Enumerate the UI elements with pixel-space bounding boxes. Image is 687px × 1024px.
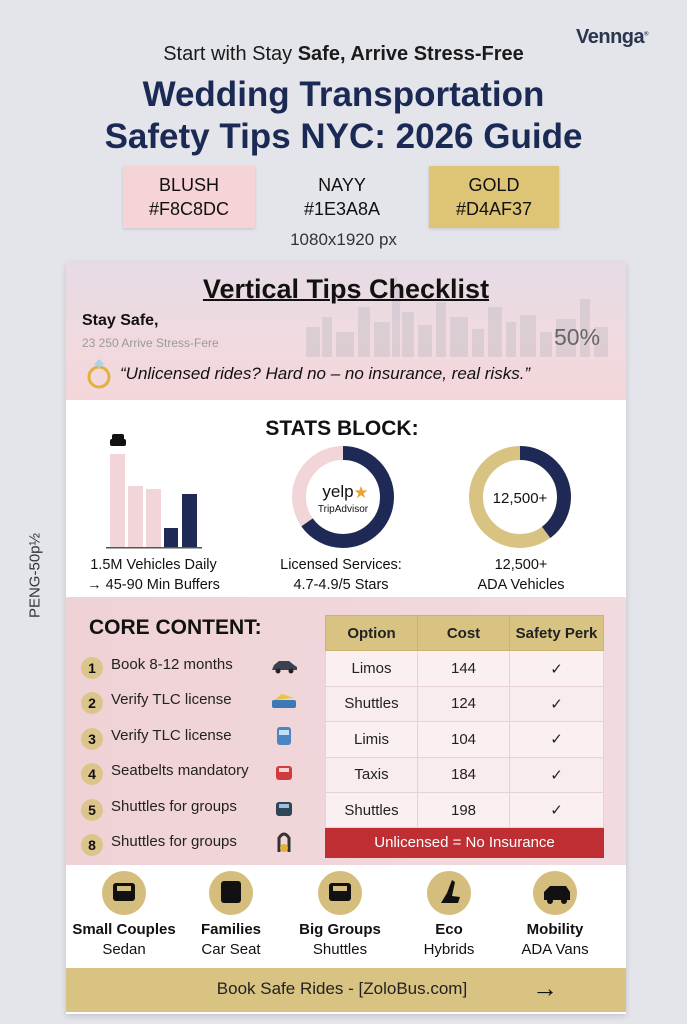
table: ✓ <box>550 767 563 784</box>
panel: core: 3 <box>88 731 96 747</box>
panel: personas <box>72 871 589 958</box>
table: ✓ <box>550 802 563 819</box>
table: 104 <box>451 731 476 748</box>
table <box>325 615 604 828</box>
swatch: blush: BLUSH <box>159 175 219 195</box>
label: vehicles <box>87 557 220 593</box>
heading: checklist: Vertical Tips Checklist <box>203 274 489 304</box>
label: licensed: Licensed Services: <box>280 557 402 573</box>
subtitle: Start with Stay Safe, Arrive Stress-Free <box>163 43 524 65</box>
panel: core: 4 <box>88 766 96 782</box>
list <box>81 656 297 856</box>
label: vehicles: 1.5M Vehicles Daily <box>90 557 217 573</box>
table: 184 <box>451 766 476 783</box>
text: faded: 23 250 Arrive Stress-Fere <box>82 336 219 350</box>
panel: stats <box>66 400 626 597</box>
panel: core: 8 <box>88 837 96 853</box>
swatch: navy: #1E3A8A <box>304 199 380 219</box>
table: 198 <box>451 802 476 819</box>
table: ✓ <box>550 661 563 678</box>
swatch: blush: #F8C8DC <box>149 199 229 219</box>
label: ada: ADA Vehicles <box>477 577 565 593</box>
panel: header <box>66 262 626 400</box>
title <box>105 75 582 156</box>
card: Families <box>201 921 261 938</box>
table: ✓ <box>550 731 563 748</box>
table: Limos <box>351 660 392 677</box>
card: Mobility <box>527 921 583 938</box>
label: licensed: 4.7-4.9/5 Stars <box>293 577 389 593</box>
donut: ratings: TripAdvisor <box>318 504 369 515</box>
logo: Vennga® <box>576 26 648 48</box>
card: Car Seat <box>201 941 261 958</box>
table: 124 <box>451 695 476 712</box>
label: ada: 12,500+ <box>495 557 547 573</box>
card: Shuttles <box>313 941 367 958</box>
panel: core: Shuttles for groups <box>111 798 237 815</box>
card: Eco <box>435 921 463 938</box>
swatch: gold: GOLD <box>468 175 520 195</box>
panel: core: Shuttles for groups <box>111 833 237 850</box>
card: Small Couples <box>72 921 176 938</box>
text: 50%: 50% <box>554 324 600 350</box>
panel: core: Verify TLC license <box>111 727 232 744</box>
callout: warning <box>325 828 604 858</box>
swatch: gold <box>429 166 559 228</box>
swatch: blush <box>123 166 255 228</box>
donut: ada: 12,500+ <box>493 490 548 507</box>
panel: core: 5 <box>88 802 96 818</box>
label: vehicles: → 45-90 Min Buffers <box>87 577 220 593</box>
label: ada <box>477 557 565 593</box>
heading: stats: STATS BLOCK: <box>265 417 419 440</box>
panel: core <box>66 597 626 865</box>
quote: “Unlicensed rides? Hard no – no insurance, real risks.” <box>120 364 530 383</box>
table: 144 <box>451 660 476 677</box>
heading: core: CORE CONTENT: <box>89 616 262 639</box>
cta bar <box>66 968 626 1012</box>
dimensions: 1080x1920 px <box>290 230 397 249</box>
cta bar: Book Safe Rides - [ZoloBus.com] <box>217 979 467 998</box>
side label: PENG-50p½ <box>26 533 44 618</box>
panel: core: 2 <box>88 695 96 711</box>
skyline <box>306 277 608 357</box>
table: ✓ <box>550 696 563 713</box>
card <box>66 262 626 1014</box>
icon: arrow: → <box>532 973 558 1003</box>
swatch: gold: #D4AF37 <box>456 199 532 219</box>
donut: ada <box>469 446 571 548</box>
donut: ratings: ★ <box>353 483 369 502</box>
table: Taxis <box>354 766 389 783</box>
swatch: navy <box>304 175 380 219</box>
icon: ring <box>88 359 110 388</box>
table: Cost <box>447 625 480 642</box>
title: Wedding Transportation <box>143 75 544 114</box>
table: Safety Perk <box>516 625 597 642</box>
swatch: navy: NAYY <box>318 175 366 195</box>
panel: core: Verify TLC license <box>111 691 232 708</box>
table: Shuttles <box>344 802 399 819</box>
card: Big Groups <box>299 921 381 938</box>
card: Hybrids <box>424 941 474 958</box>
table: Shuttles <box>344 695 399 712</box>
donut: ratings: yelp <box>322 482 354 501</box>
table: Limis <box>354 731 389 748</box>
card: Sedan <box>102 941 146 958</box>
table: Option <box>347 625 396 642</box>
donut: ratings <box>292 446 394 548</box>
card: ADA Vans <box>521 941 589 958</box>
panel: core: Seatbelts mandatory <box>111 762 249 779</box>
text: stay safe: Stay Safe, <box>82 312 158 329</box>
title: Safety Tips NYC: 2026 Guide <box>105 117 582 156</box>
label: licensed <box>280 557 402 593</box>
callout: warning: Unlicensed = No Insurance <box>374 834 555 851</box>
panel: core: 1 <box>88 660 96 676</box>
bar chart <box>106 434 202 548</box>
panel: core: Book 8-12 months <box>111 656 233 673</box>
